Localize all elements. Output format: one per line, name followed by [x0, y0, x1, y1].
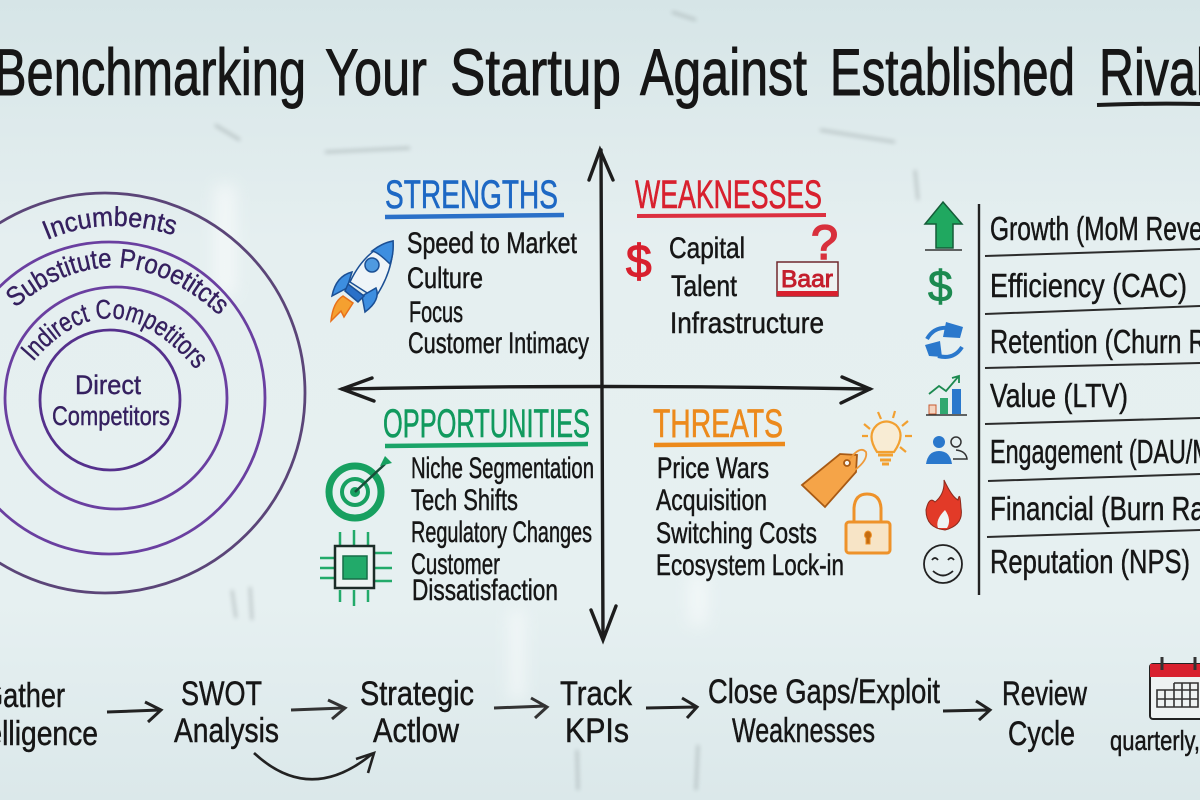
step: close gaps: Close Gaps/Exploit: [708, 673, 940, 711]
list: strengths: Customer Intimacy: [408, 327, 589, 360]
icon: bar box with question mark: Baar: [781, 266, 833, 293]
arrow: [646, 698, 697, 718]
panel: opportunities: [320, 402, 594, 607]
list: opportunities: Customer: [411, 548, 500, 581]
step: swot analysis: Analysis: [174, 712, 279, 750]
arrow: [291, 700, 345, 719]
list: opportunities: Tech Shifts: [411, 484, 518, 517]
list: opportunities: Dissatisfaction: [412, 574, 558, 607]
list: weaknesses: Capital: [669, 232, 745, 265]
step: track kpis: [560, 675, 633, 750]
list: opportunities: [411, 452, 594, 607]
title: Against: [640, 35, 807, 109]
panel: competitor circles: [0, 192, 306, 594]
step: track kpis: Track: [560, 675, 633, 713]
icon: calendar: [1150, 657, 1200, 719]
metric: financial: [926, 480, 1200, 530]
heading: weaknesses: WEAKNESSES: [635, 173, 822, 217]
label: indirect competitors: Indirect Competitors: [20, 300, 205, 368]
SWOT axes arrows: [342, 150, 870, 640]
icon: target: [329, 456, 392, 518]
step: gather intelligence: [0, 677, 98, 753]
icon: padlock: [846, 494, 890, 553]
metric: reputation: [924, 543, 1190, 583]
title: Benchmarking: [0, 35, 306, 109]
label: direct competitors: [52, 370, 170, 431]
title: Established: [830, 35, 1075, 109]
panel: threats: [653, 402, 912, 582]
arrow: feedback curve: [254, 753, 374, 779]
icon: bar box with question mark: ?: [811, 217, 838, 270]
heading: opportunities: OPPORTUNITIES: [383, 402, 590, 446]
panel: strengths: [331, 173, 589, 360]
list: weaknesses: [669, 232, 824, 340]
list: threats: Price Wars: [657, 452, 769, 485]
list: strengths: [407, 227, 589, 360]
list: threats: [656, 452, 844, 582]
label: substitute: Substitute Prooetitcts: [6, 248, 227, 314]
label: incumbents: Incumbents: [42, 206, 176, 240]
heading: threats: THREATS: [653, 402, 783, 446]
list: opportunities: Niche Segmentation: [411, 452, 594, 485]
process flow: [0, 657, 1200, 779]
step: strategic action: Strategic: [360, 675, 474, 713]
step: review cycle: [1002, 675, 1087, 753]
step: review cycle: Cycle: [1008, 715, 1075, 753]
metric: value: Value (LTV): [990, 377, 1128, 414]
list: strengths: Culture: [407, 262, 483, 295]
list: opportunities: Regulatory Changes: [411, 516, 592, 549]
title: [0, 35, 1200, 109]
concentric rings: [0, 193, 305, 593]
step: swot analysis: SWOT: [181, 675, 262, 713]
step: strategic action: Actlow: [373, 712, 459, 750]
list: weaknesses: Infrastructure: [670, 307, 824, 340]
metric: value: [926, 376, 1128, 415]
icon: bar box with question mark: [777, 217, 838, 296]
label: direct competitors: Direct: [75, 370, 141, 400]
list: weaknesses: Talent: [671, 270, 738, 303]
arrow: [107, 702, 161, 722]
metric: efficiency: [928, 262, 1187, 311]
step: track kpis: KPIs: [565, 712, 629, 750]
list: strengths: Focus: [409, 296, 463, 329]
panel: weaknesses: [626, 173, 838, 340]
label: direct competitors: Competitors: [52, 401, 170, 431]
list: strengths: Speed to Market: [407, 227, 578, 260]
list: threats: Switching Costs: [656, 517, 817, 550]
icon: rocket: [331, 241, 393, 321]
step: close gaps: Weaknesses: [732, 712, 875, 750]
icon: price tag: [802, 450, 866, 507]
step: strategic action: [360, 675, 474, 750]
title: Startup: [450, 35, 621, 109]
list: threats: Acquisition: [656, 484, 767, 517]
step: swot analysis: [174, 675, 279, 750]
step: review cycle: Review: [1002, 675, 1087, 713]
icon: light bulb: [862, 411, 912, 464]
arrow: [494, 698, 547, 718]
arrow: [943, 701, 990, 720]
panel: KPI metrics: [924, 202, 1200, 595]
title: Your: [325, 35, 427, 109]
step: close gaps: [708, 673, 940, 750]
list: threats: Ecosystem Lock-in: [656, 549, 844, 582]
icon: chip: [320, 530, 392, 606]
heading: strengths: STRENGTHS: [385, 173, 558, 217]
icon: dollar: $: [626, 235, 652, 287]
metric: efficiency: $: [928, 262, 952, 311]
metric: growth: [925, 202, 1200, 250]
